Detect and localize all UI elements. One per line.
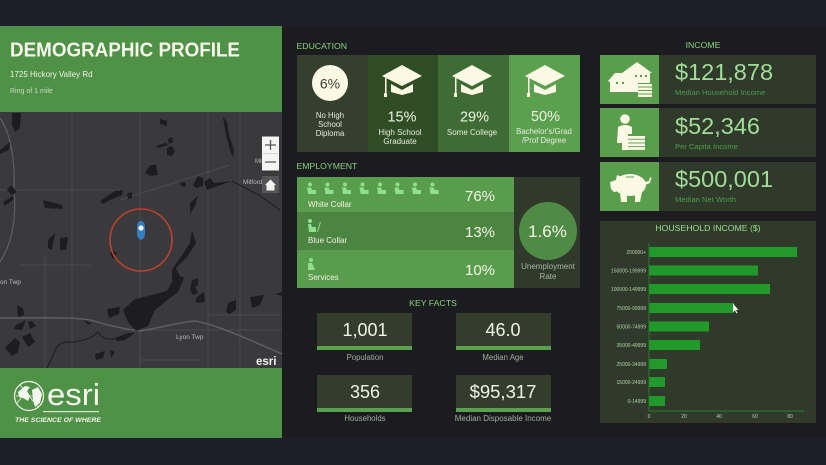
column: no high school: No High [316,111,344,120]
value axis labels: 20 [681,414,687,420]
zoom control [262,136,279,170]
fact: households: 356 [350,382,380,402]
card: median net worth [600,162,816,211]
category labels: 0-14999 [628,399,646,405]
card: per capita income: $52,346 [675,113,760,139]
value axis labels: 80 [787,414,793,420]
column: high school graduate: High School [378,128,422,137]
panel: footer logo [0,368,282,438]
icon: esri globe [14,382,44,410]
column: high school graduate: 15% [387,110,417,126]
esri attribution: esri [256,356,276,368]
row: white collar: White Collar [308,200,352,209]
icon: home button [262,176,279,193]
icon: graduation cap [452,65,492,97]
heading: education: EDUCATION [296,41,347,51]
column: no high school: School [318,120,342,129]
icon: houses and coins [608,62,652,97]
heading: key facts: KEY FACTS [409,298,457,308]
icons: office workers [307,182,438,194]
fact: population: 1,001 [342,320,388,340]
water bodies [0,113,282,360]
icon: service worker [308,258,315,270]
fact: median disposable income: Median Disposable Income [455,414,552,423]
column: no high school: Diploma [316,129,345,138]
bars [649,247,797,406]
row: blue collar: 13% [465,224,495,241]
panel: map [0,112,282,368]
roads [0,118,282,354]
column: high school graduate [368,55,438,152]
icon: graduation cap [382,65,422,97]
fact: households [317,375,412,423]
heading: employment: EMPLOYMENT [296,161,358,171]
column: no high school: 6% [320,76,340,92]
card: median net worth: Median Net Worth [675,195,736,204]
column: bachelor's [509,55,580,152]
row: white collar [297,177,514,212]
card: median net worth: $500,001 [675,166,773,192]
chart title: HOUSEHOLD INCOME ($) [655,223,761,233]
category labels: 150000-199999 [611,268,646,274]
panel: household income chart [600,221,816,423]
row: services [297,250,514,288]
card: median household income [600,55,816,104]
panel: income [600,55,816,211]
title: DEMOGRAPHIC PROFILE [10,38,240,62]
column: no high school [297,55,368,152]
card: median household income: Median Household Income [675,88,765,97]
ring buffer [110,209,172,271]
row: white collar: 76% [465,188,495,205]
fact: population: Population [347,353,383,362]
column: bachelor's: Bachelor's/Grad [516,127,572,136]
logo wordmark: esri [47,377,100,412]
heading: income: INCOME [686,40,721,50]
row: services: 10% [465,262,495,279]
column: bachelor's: /Prof Degree [522,136,566,145]
row: blue collar: Blue Collar [308,236,347,245]
icon: piggy bank [610,174,652,202]
row: blue collar [297,212,514,250]
value axis labels: 60 [752,414,758,420]
column: some college: 29% [460,110,489,126]
row: services: Services [308,273,339,282]
tagline: THE SCIENCE OF WHERE [15,418,102,424]
icon: graduation cap [525,65,565,97]
fact: median age: 46.0 [485,320,521,340]
card: per capita income: Per Capita Income [675,142,738,151]
panel: key facts [317,313,552,423]
fact: households: Households [344,414,386,423]
map labels: Milford [255,159,273,165]
value axis labels: 40 [716,414,722,420]
fact: median disposable income: $95,317 [470,381,536,402]
category labels [611,250,646,405]
column: bachelor's: 50% [531,109,560,125]
map labels: on Twp [0,279,21,286]
category labels: 15000-24999 [617,380,646,386]
fact: population [317,313,412,362]
column: high school graduate: Graduate [383,137,417,146]
icon: mouse cursor [733,304,738,314]
unemployment rate: Unemployment [521,262,576,271]
category labels: 75000-99999 [617,306,646,312]
category labels: 25000-34999 [617,362,646,368]
card: per capita income [600,108,816,157]
axes [649,243,804,411]
map labels [0,159,273,341]
unemployment rate: Rate [540,272,557,281]
icon: map pin [137,221,145,240]
address: 1725 Hickory Valley Rd [10,70,93,79]
unemployment rate: 1.6% [528,222,567,241]
panel: header [0,26,282,112]
fact: median age [456,313,551,362]
fact: median age: Median Age [482,353,524,362]
value axis labels [648,414,793,420]
icon: person and coins [617,114,645,150]
value axis labels: 0 [648,414,651,420]
map labels: Milford [243,179,263,186]
fact: median disposable income [455,375,552,423]
icon: manual worker [308,219,321,232]
panel: education [297,55,580,152]
category labels: 50000-74999 [617,324,646,330]
category labels: 200000+ [626,250,646,256]
column: some college [438,55,509,152]
unemployment rate [514,177,580,288]
map labels: Lyon Twp [176,334,204,341]
category labels: 35000-49999 [617,343,646,349]
ring label: Ring of 1 mile [10,88,53,95]
panel: employment [297,177,580,288]
column: some college: Some College [447,128,498,137]
card: median household income: $121,878 [675,59,773,85]
category labels: 100000-149999 [611,287,646,293]
